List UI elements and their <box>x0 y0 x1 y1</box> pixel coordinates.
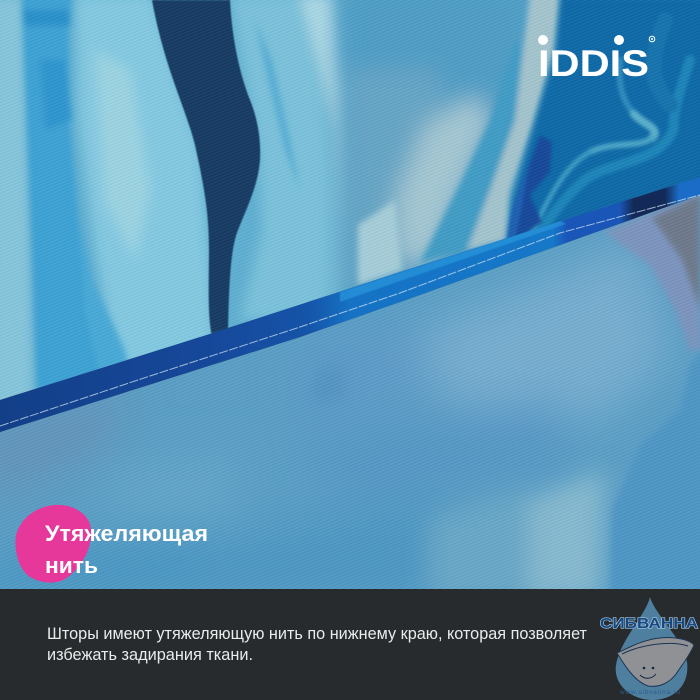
watermark: Sibvanna logo <box>600 597 698 700</box>
stitching thread <box>0 195 700 426</box>
logo: IDDIS: IDDIS <box>538 43 649 84</box>
caption text: избежать задирания ткани. <box>47 646 253 664</box>
caption text: Шторы имеют утяжеляющую нить по нижнему краю, которая позволяет <box>47 625 587 643</box>
pale band <box>467 0 563 250</box>
watermark: Sibvanna logo: СИБВАННА <box>600 615 698 632</box>
heading: Утяжеляющая <box>45 521 208 546</box>
heading: нить <box>45 553 98 578</box>
panel: lower curtain fabric <box>0 190 700 600</box>
marbled deep blue area <box>510 0 700 245</box>
panel: caption bar <box>0 589 700 700</box>
dark vertical stripe <box>152 0 260 340</box>
watermark: Sibvanna logo: www.sibvanna.ru <box>619 689 680 696</box>
accent: pink blob <box>16 505 91 583</box>
teal band <box>418 45 519 264</box>
hem with weighted thread <box>0 170 700 440</box>
panel: upper curtain fabric <box>0 0 700 420</box>
